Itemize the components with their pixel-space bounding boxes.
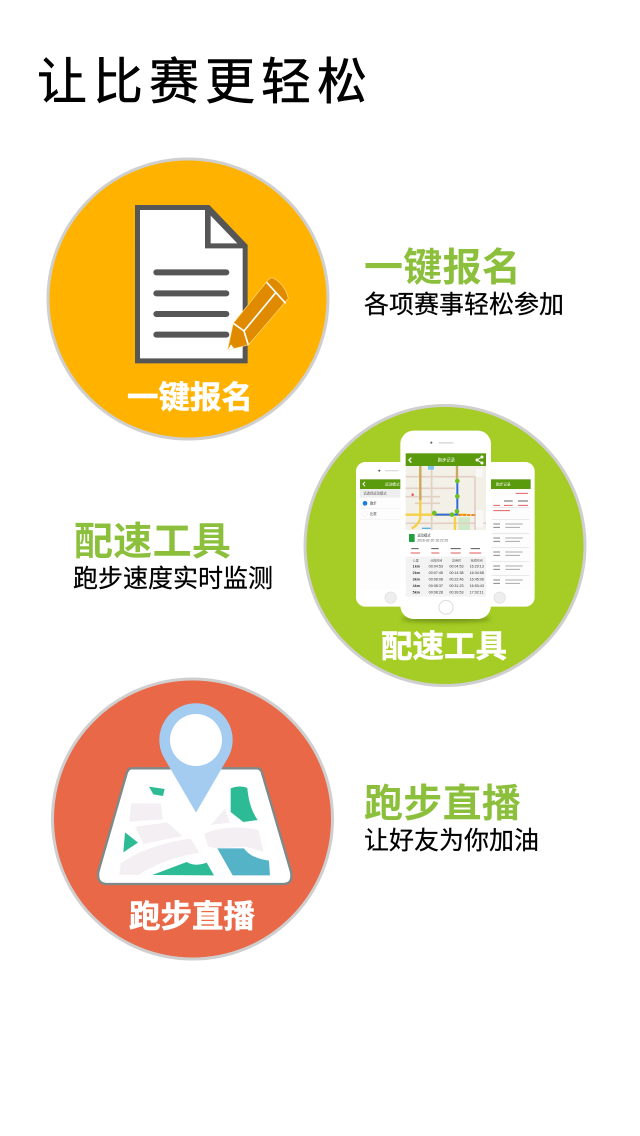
circle background: red-orange <box>52 679 332 959</box>
illustration: three phones <box>356 431 535 622</box>
phone splits table: 00:08:37 <box>429 584 443 588</box>
heading: pace tool: 配速工具 <box>74 521 231 564</box>
phone splits table: 00:08:08 <box>429 578 443 582</box>
phone splits table: 17:02:11 <box>470 590 484 594</box>
phone splits table: 00:22:46 <box>449 578 464 582</box>
phone splits table: 00:31:23 <box>449 584 464 588</box>
phone summary <box>409 534 415 542</box>
phone splits table: 2km <box>413 571 421 575</box>
phone: left: 运动模式 <box>385 482 400 487</box>
circle background: green <box>305 406 585 686</box>
phone: right: 跑步记录 <box>496 482 511 487</box>
phone splits table: 16:29:13 <box>470 565 484 569</box>
phone header <box>406 453 486 466</box>
text: sign-up description: 各项赛事轻松参加 <box>364 291 564 319</box>
phone: left: 请选择运动模式 <box>363 491 387 496</box>
phone: left <box>356 462 423 607</box>
phone splits table: 00:07:45 <box>429 571 443 575</box>
phone: right <box>467 462 535 607</box>
circle label: 跑步直播 <box>129 898 255 934</box>
phone splits table: 1km <box>413 565 421 569</box>
phone splits table: 总用时 <box>452 557 461 562</box>
phone splits table: 16:45:06 <box>470 578 484 582</box>
phone: centre: 2016-02-20 16:22:20 <box>417 538 448 542</box>
phone map <box>406 466 486 530</box>
phone splits table: 00:39:53 <box>449 590 464 594</box>
icon: map with location pin <box>98 703 291 884</box>
title: 让比赛更轻松 <box>37 54 373 110</box>
phone splits table: 完成时间 <box>471 557 483 562</box>
phone splits table <box>406 557 486 597</box>
phone splits table: 16:53:43 <box>470 584 484 588</box>
panel: live tracking circle <box>52 679 332 959</box>
phone splits table: 00:04:53 <box>429 565 443 569</box>
phone: left: 跑步 <box>370 500 377 505</box>
heading: sign-up: 一键报名 <box>364 247 521 290</box>
phone splits table: 公里 <box>413 557 419 562</box>
panel: pace tool circle <box>305 406 585 686</box>
phone: centre: 跑步记录 <box>438 456 456 463</box>
phone splits table: 分段时间 <box>430 557 442 562</box>
phone splits table: 00:08:28 <box>429 590 443 594</box>
phone splits table: 16:34:58 <box>470 571 484 575</box>
circle background: orange <box>48 159 328 439</box>
phone: left: 比赛 <box>370 511 377 516</box>
icon: document with pencil <box>135 205 288 363</box>
panel: sign-up circle <box>48 159 328 439</box>
phone: centre: 运动模式 <box>417 533 431 538</box>
heading: live tracking: 跑步直播 <box>364 783 521 826</box>
phone splits table: 5km <box>413 590 421 594</box>
phone splits table: 3km <box>413 578 421 582</box>
phone splits table: 00:04:53 <box>449 565 464 569</box>
text: live tracking description: 让好友为你加油 <box>364 827 539 855</box>
phone splits table: 4km <box>413 584 421 588</box>
phone splits table: 00:14:38 <box>449 571 464 575</box>
text: pace tool description: 跑步速度实时监测 <box>73 565 273 593</box>
phone: centre <box>400 431 491 622</box>
circle label: 配速工具 <box>381 628 507 664</box>
circle label: 一键报名 <box>127 379 253 415</box>
